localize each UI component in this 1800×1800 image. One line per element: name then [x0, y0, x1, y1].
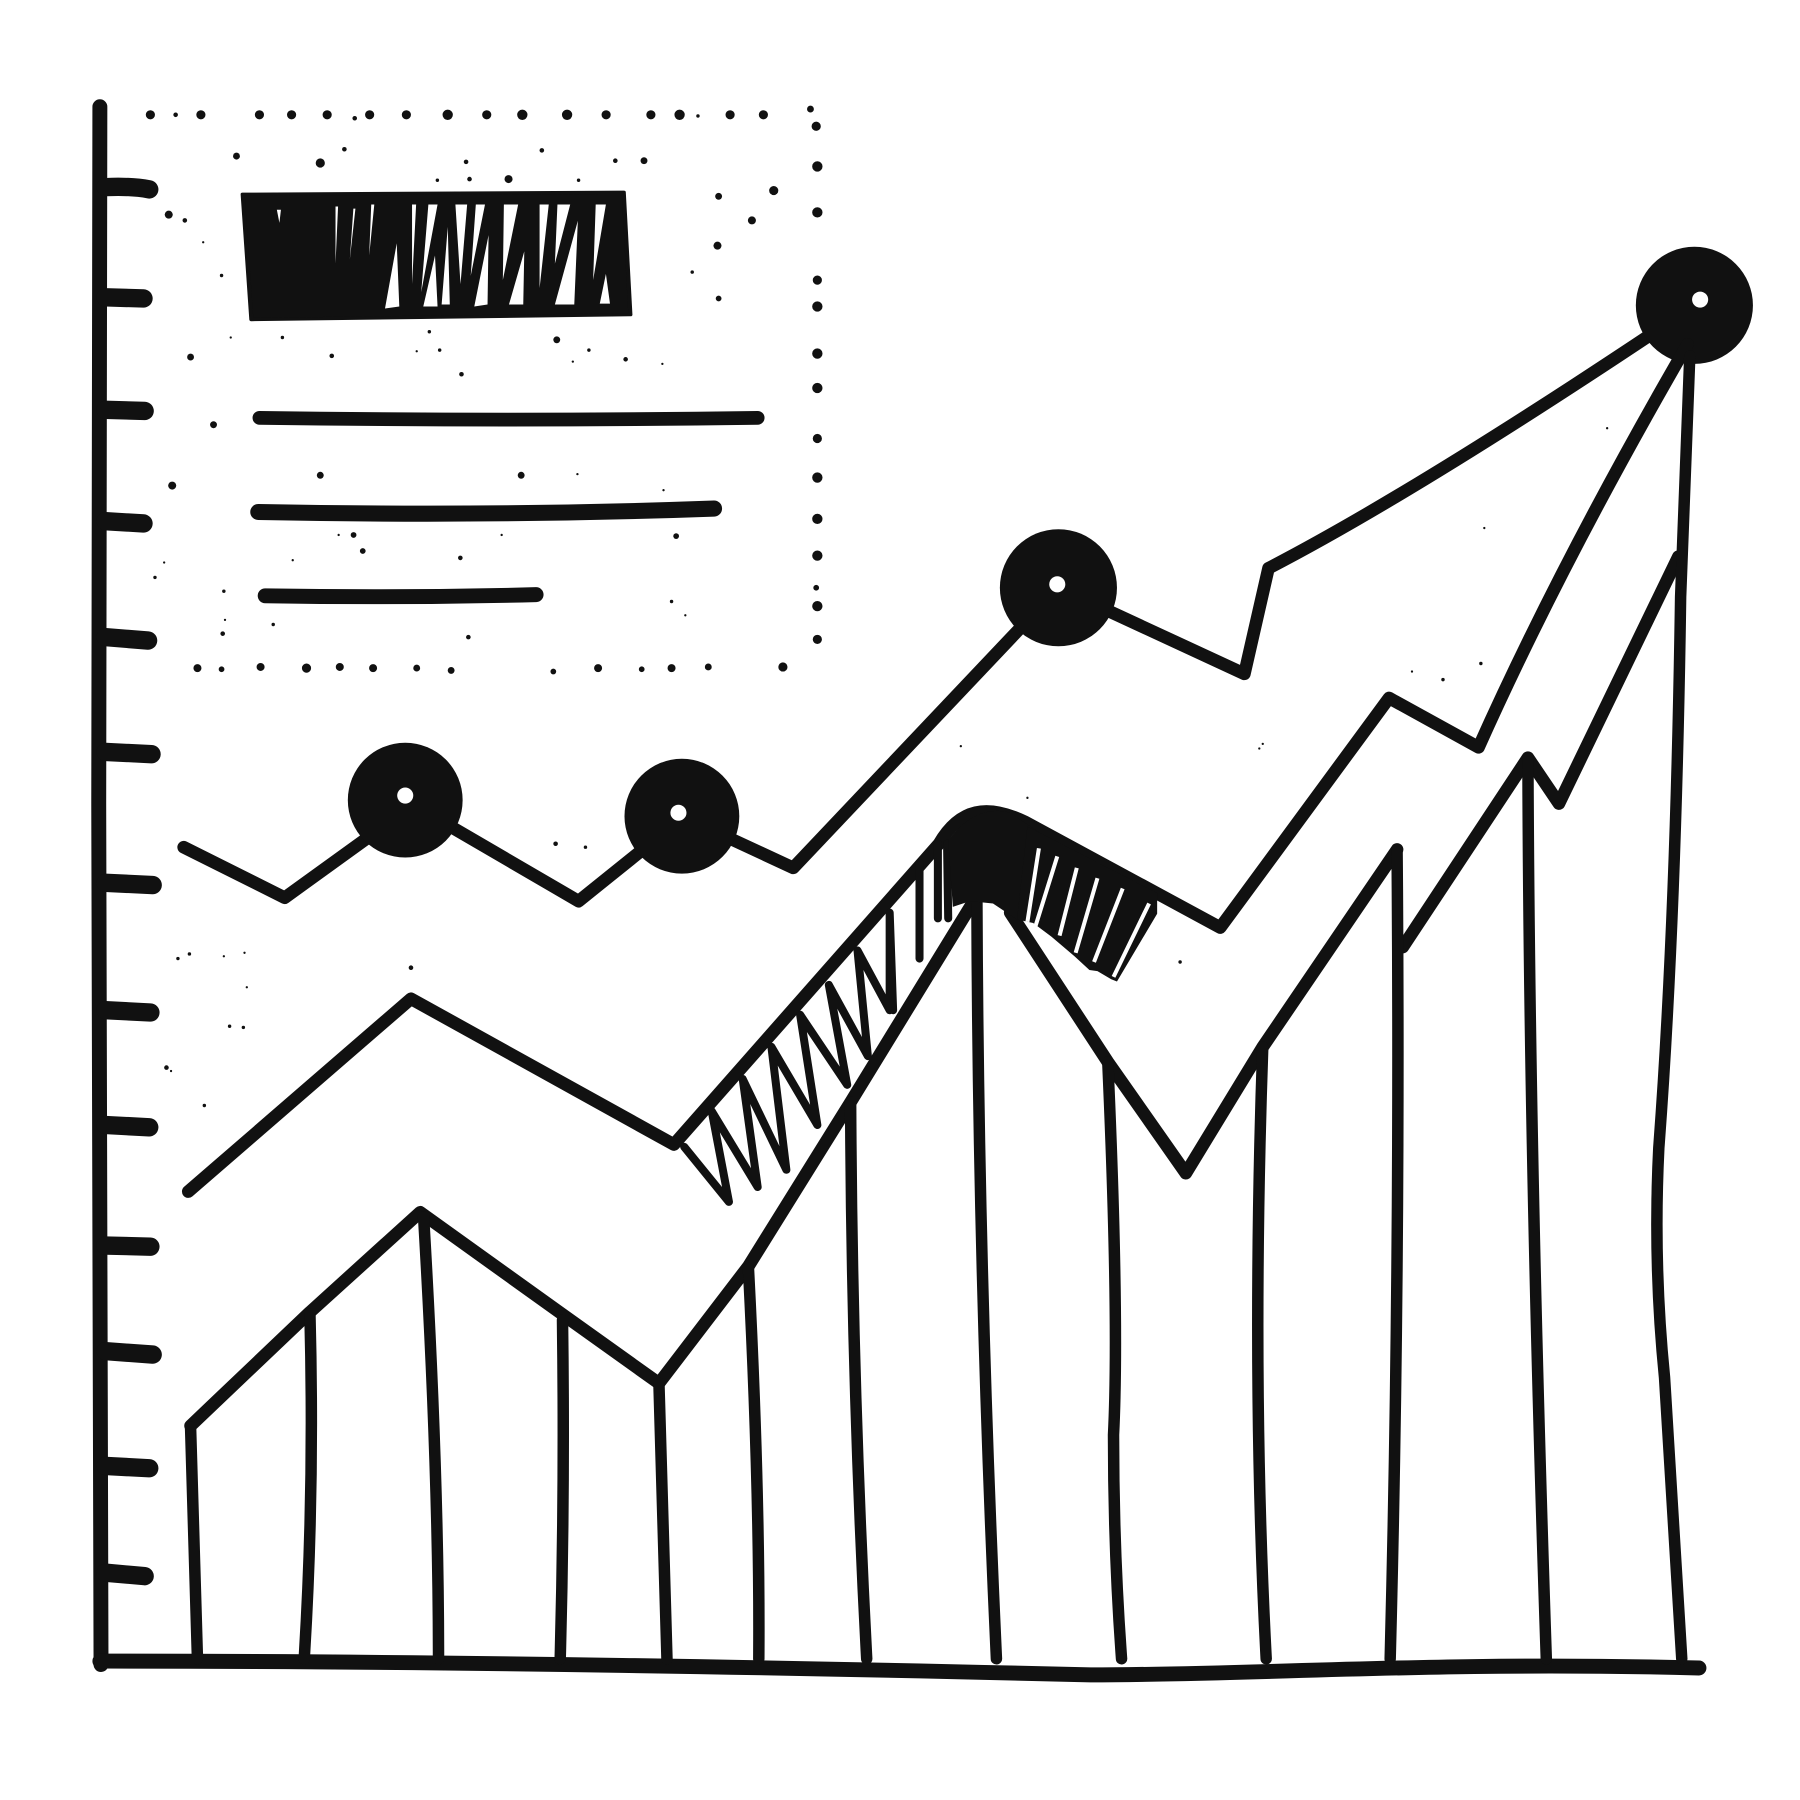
- dotted legend box border: [146, 106, 822, 674]
- upper data line: [184, 305, 1694, 901]
- data point markers: [348, 247, 1753, 874]
- legend text lines: [258, 418, 758, 597]
- horizontal axis: [100, 1661, 1699, 1675]
- middle data line with rounded peak: [188, 344, 1688, 1192]
- legend title block: scribbled bar: [243, 192, 630, 320]
- vertical bars under the lower line: [191, 356, 1690, 1659]
- scattered ink specks: [153, 147, 1608, 1107]
- vertical axis with tick marks: [99, 107, 153, 1665]
- dense ink blob at peak: [948, 811, 1039, 920]
- lower data line: [191, 557, 1678, 1426]
- dense hatching under the falling segment: [1017, 827, 1157, 982]
- zigzag hatching under the rising segment: [684, 844, 948, 1202]
